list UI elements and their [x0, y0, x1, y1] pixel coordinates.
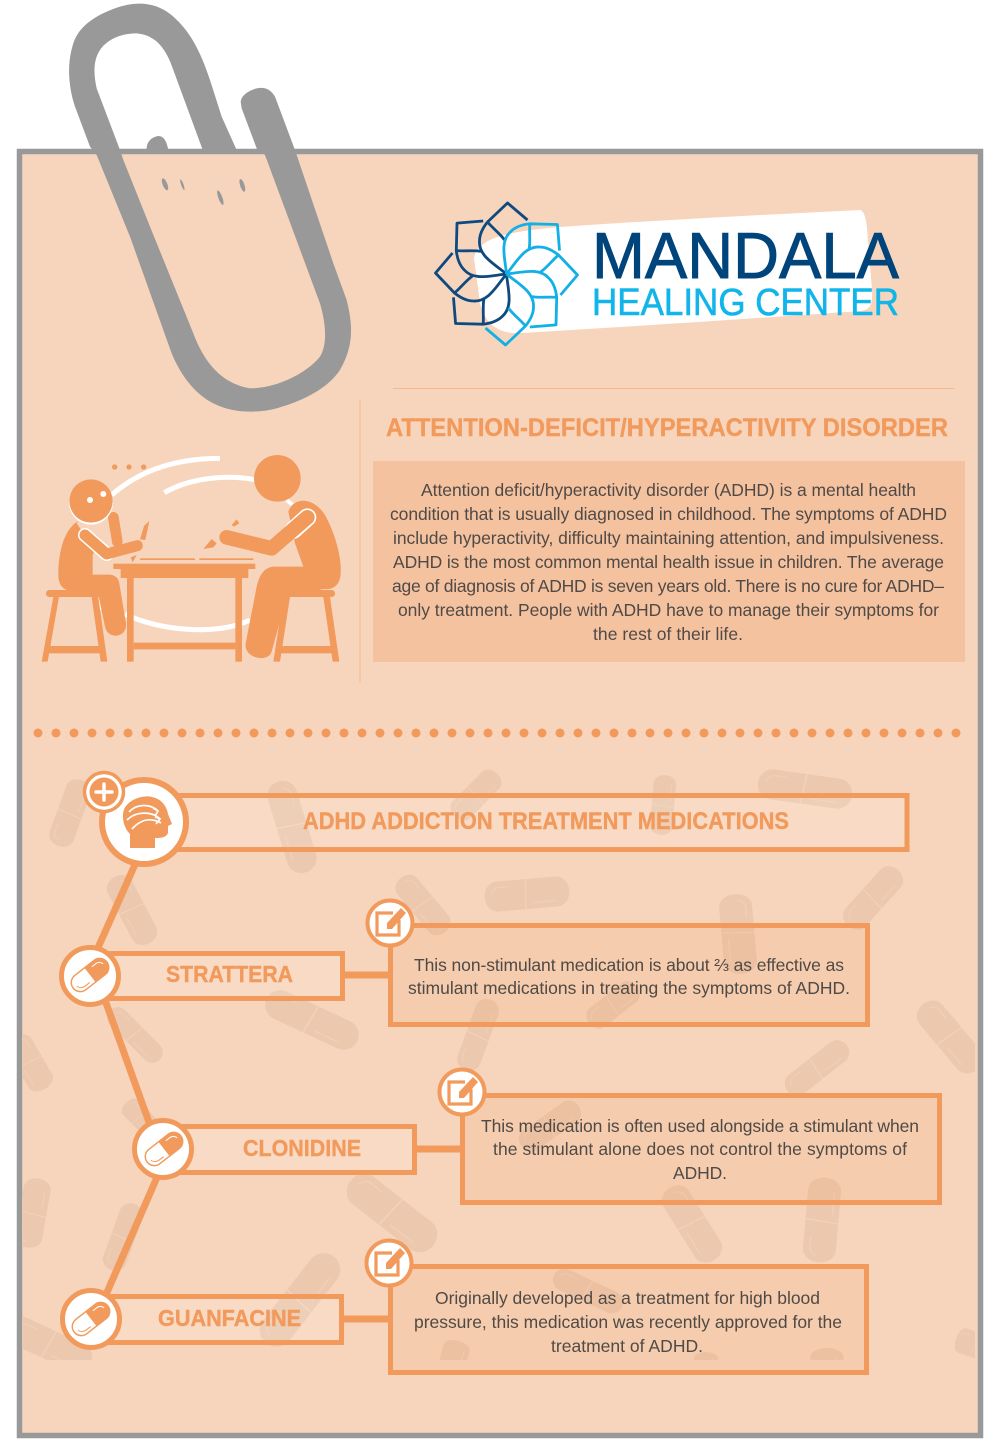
heading text: ADHD ADDICTION TREATMENT MEDICATIONS — [303, 808, 789, 835]
illustration: child and adult at a table — [42, 455, 341, 662]
white orbit arcs — [98, 458, 293, 630]
heading bar — [150, 796, 907, 850]
description: Guanfacine: Originally developed as a treatment for high blood — [435, 1288, 820, 1308]
label: Strattera — [100, 954, 342, 998]
label: Strattera: STRATTERA — [166, 961, 293, 987]
label: Guanfacine: GUANFACINE — [158, 1305, 301, 1331]
description: Clonidine — [462, 1096, 940, 1202]
description: Strattera: This non-stimulant medication is about ⅔ as effective as — [414, 955, 844, 975]
icon: capsule — [62, 1290, 120, 1348]
label: Guanfacine — [100, 1296, 342, 1342]
icon: note with pencil — [440, 1070, 484, 1114]
icon: plus badge — [84, 772, 124, 812]
intro text: only treatment. People with ADHD have to manage their symptoms for — [398, 600, 939, 620]
step: Guanfacine — [62, 1240, 866, 1372]
intro text: include hyperactivity, difficulty maintaining attention, and impulsiveness. — [393, 528, 944, 548]
logo: wordmark MANDALA: MANDALA — [592, 219, 900, 292]
intro text: condition that is usually diagnosed in childhood. The symptoms of ADHD — [390, 504, 947, 524]
logo: white brush backdrop — [474, 210, 872, 333]
intro text: ADHD is the most common mental health issue in children. The average — [393, 552, 944, 572]
icon: capsule — [134, 1120, 192, 1178]
logo — [436, 203, 900, 345]
step: Strattera — [62, 900, 868, 1024]
description: Clonidine: the stimulant alone does not control the symptoms of — [493, 1139, 907, 1159]
logo: mandala flower — [436, 203, 578, 345]
logo: wordmark HEALING CENTER: HEALING CENTER — [592, 282, 899, 324]
intro text: age of diagnosis of ADHD is seven years old. There is no cure for ADHD– — [392, 576, 944, 596]
icon: brain head — [102, 780, 186, 864]
background pill pattern — [3, 765, 998, 1408]
icon: capsule — [62, 948, 118, 1004]
description: Clonidine: This medication is often used alongside a stimulant when — [481, 1116, 919, 1136]
thinking dots — [112, 464, 146, 470]
description: Strattera — [390, 926, 868, 1024]
timeline connector — [97, 860, 158, 1297]
label: Clonidine: CLONIDINE — [243, 1135, 361, 1161]
intro text: the rest of their life. — [593, 624, 743, 644]
adult figure — [203, 455, 341, 658]
description: Clonidine: ADHD. — [673, 1163, 727, 1183]
intro panel — [373, 461, 965, 662]
table — [113, 558, 255, 662]
step: Clonidine — [134, 1070, 940, 1202]
paperclip — [69, 4, 351, 412]
description: Guanfacine: treatment of ADHD. — [551, 1336, 703, 1356]
icon: note with pencil — [366, 1240, 412, 1286]
icon: note with pencil — [368, 900, 412, 946]
stools — [42, 590, 339, 662]
section title: ATTENTION-DEFICIT/HYPERACTIVITY DISORDER — [386, 414, 948, 442]
description: Strattera: stimulant medications in treating the symptoms of ADHD. — [408, 978, 850, 998]
intro text: Attention deficit/hyperactivity disorder (ADHD) is a mental health — [421, 480, 916, 500]
label: Clonidine — [173, 1126, 414, 1172]
description: Guanfacine: pressure, this medication was recently approved for the — [414, 1312, 842, 1332]
description: Guanfacine — [390, 1266, 866, 1372]
child figure — [58, 479, 149, 636]
